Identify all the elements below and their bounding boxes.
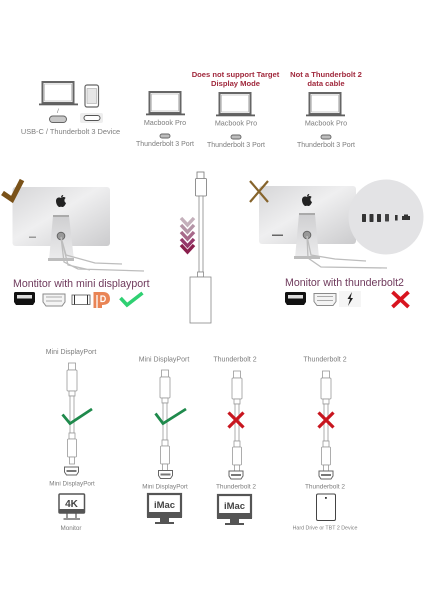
icon: orange DP logo xyxy=(94,292,110,308)
port label: Thunderbolt 2 xyxy=(305,484,345,490)
icon: laptop xyxy=(146,92,185,115)
input label: Mini DisplayPort xyxy=(46,349,96,356)
input label: Thunderbolt 2 xyxy=(303,356,347,364)
port label: Thunderbolt 3 Port xyxy=(207,142,265,149)
input label: Thunderbolt 2 xyxy=(213,356,257,364)
cable xyxy=(321,371,331,472)
warning: not a Thunderbolt 2 cable: Not a Thunderbolt 2 xyxy=(290,70,362,79)
icon: black mini DP port xyxy=(285,292,306,305)
device label: Monitor xyxy=(60,525,82,532)
Macbook Pro column 2 xyxy=(207,93,265,149)
icon: port xyxy=(319,471,333,479)
icon: red cross xyxy=(228,412,244,428)
icon: green check xyxy=(156,409,186,424)
model label: Macbook Pro xyxy=(215,118,257,128)
icon: phone xyxy=(85,85,98,107)
icon: laptop xyxy=(39,82,78,105)
monitor back xyxy=(259,186,387,268)
icon: Thunderbolt 3 port xyxy=(80,113,103,123)
icon: brown check xyxy=(2,180,22,200)
icon: green check xyxy=(62,409,92,424)
Macbook Pro column 1 xyxy=(136,92,194,148)
icon: red cross xyxy=(392,292,408,307)
port label: Thunderbolt 3 Port xyxy=(136,141,194,148)
icon: thunderbolt symbol xyxy=(339,291,361,307)
icon: grey mini DP port xyxy=(43,294,65,306)
icon: iMac xyxy=(147,494,182,524)
compatibility column: Thunderbolt 2 iMac xyxy=(213,356,257,525)
icon: 4K monitor xyxy=(59,494,84,519)
caption: Monitor with thunderbolt2 xyxy=(285,277,404,289)
input label: Mini DisplayPort xyxy=(139,356,189,364)
icon: port xyxy=(158,470,172,478)
port label: Mini DisplayPort xyxy=(49,480,95,488)
cable xyxy=(160,370,170,471)
icon: port xyxy=(229,471,243,479)
center adapter cable xyxy=(190,172,211,323)
caption: Montitor with mini displayport xyxy=(13,278,150,290)
cable xyxy=(67,363,77,464)
compatibility column: Thunderbolt 2 device xyxy=(293,356,357,532)
icon: red cross xyxy=(318,412,334,428)
icon: USB-C port: / xyxy=(57,109,59,115)
icon: iMac xyxy=(217,495,252,525)
port label: Thunderbolt 3 Port xyxy=(297,142,355,149)
warning: not a Thunderbolt 2 cable xyxy=(290,70,362,88)
icon: brown cross xyxy=(250,181,268,202)
icon: green check xyxy=(120,293,142,305)
icon: laptop xyxy=(306,93,345,116)
arrow: downward chevrons xyxy=(181,218,194,252)
USB-C / Thunderbolt 3 device group xyxy=(21,82,120,136)
panel: monitor with mini displayport xyxy=(2,180,150,308)
icon: port xyxy=(231,135,241,139)
icon: port xyxy=(321,135,331,139)
compatibility column: Mini DisplayPort 4K xyxy=(46,349,96,532)
icon: mini DP outline xyxy=(72,295,90,304)
icon: laptop xyxy=(216,93,255,116)
model label: Macbook Pro xyxy=(144,118,186,127)
icon: hard drive xyxy=(316,494,336,520)
warning: Target Display Mode: Display Mode xyxy=(211,79,260,88)
Macbook Pro column 3 xyxy=(297,93,355,149)
port label: Mini DisplayPort xyxy=(142,484,188,490)
panel: monitor with thunderbolt2 xyxy=(250,180,424,307)
icon: 4K monitor: 4K xyxy=(65,499,79,510)
icon: grey mini DP port xyxy=(314,294,336,306)
device caption: USB-C / Thunderbolt 3 Device xyxy=(21,127,120,136)
warning: Target Display Mode xyxy=(192,70,280,88)
warning: not a Thunderbolt 2 cable: data cable xyxy=(307,79,345,88)
icon: port xyxy=(64,467,78,475)
cable xyxy=(232,371,242,472)
icon: black mini DP port xyxy=(14,292,35,305)
port label: Thunderbolt 2 xyxy=(216,484,256,490)
port detail circle xyxy=(348,180,424,254)
monitor back xyxy=(12,187,144,271)
device label: Hard Drive or TBT 2 Device xyxy=(293,526,357,532)
icon: port xyxy=(160,134,170,138)
warning: Target Display Mode: Does not support Target xyxy=(192,70,280,79)
model label: Macbook Pro xyxy=(305,118,347,128)
compatibility column: Mini DisplayPort iMac xyxy=(139,356,189,524)
